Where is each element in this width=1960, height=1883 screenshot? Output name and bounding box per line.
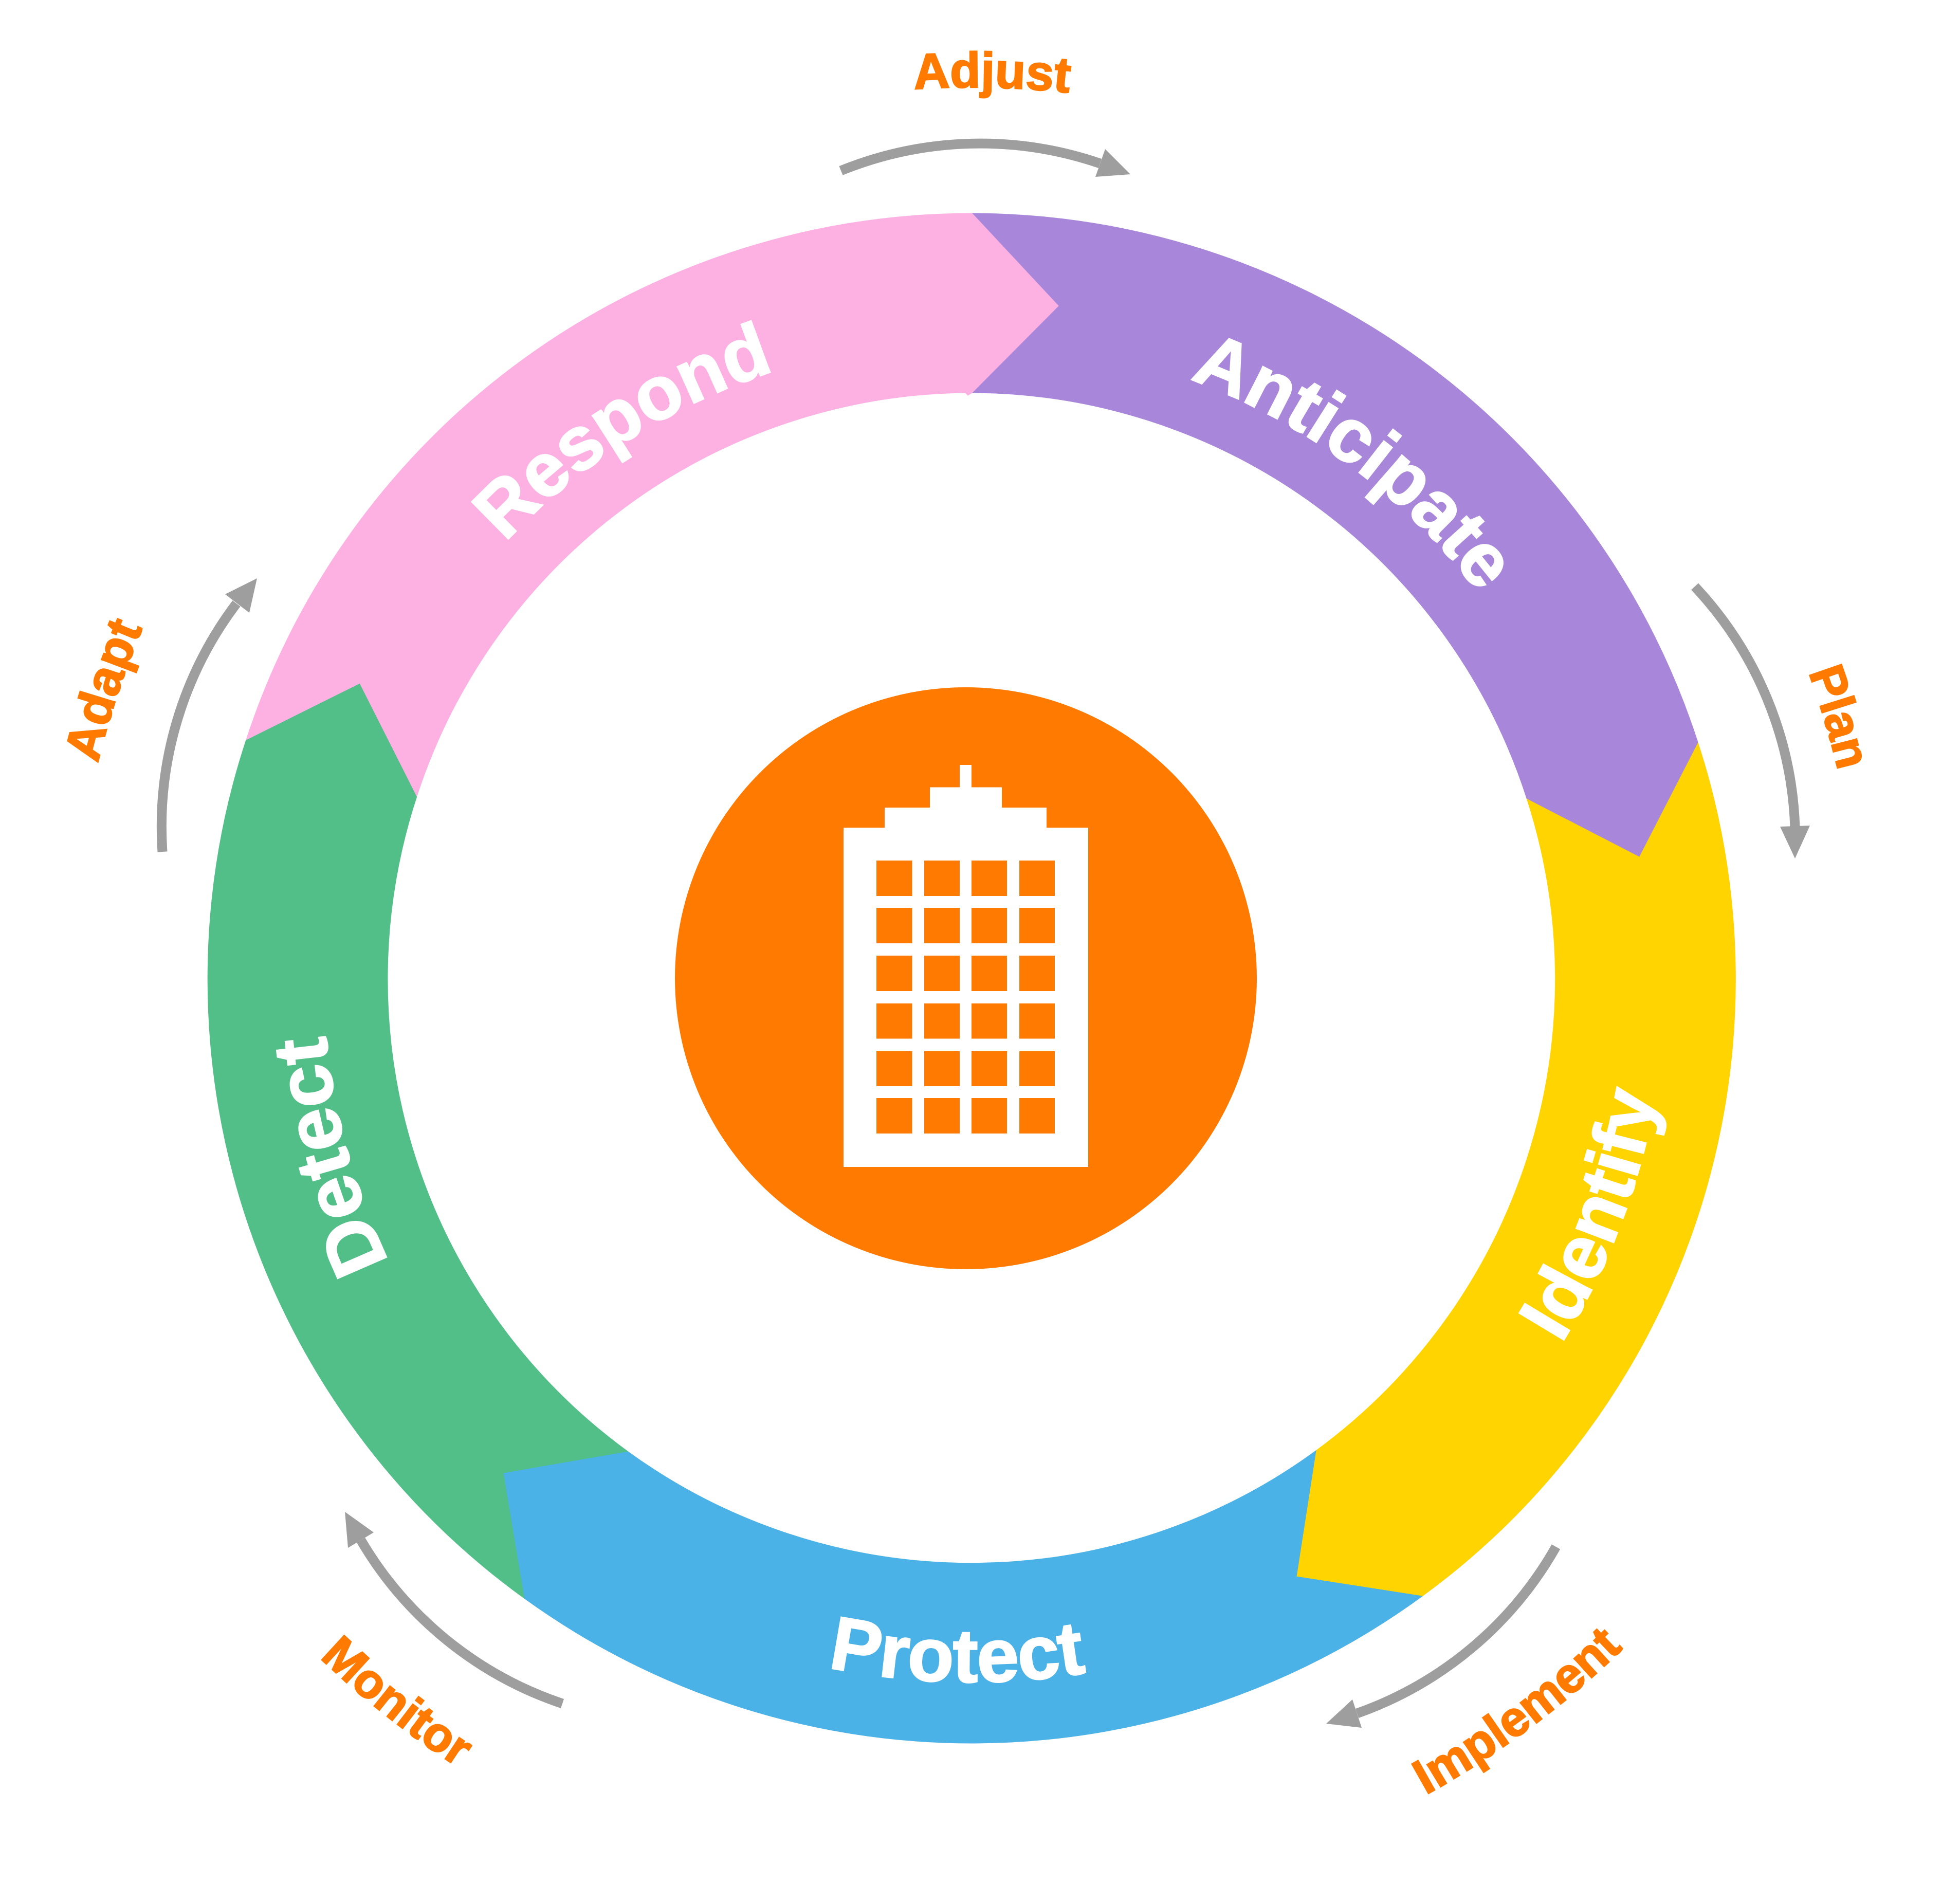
- label: Plan: Plan: [1809, 663, 1862, 769]
- label: Respond: Respond: [471, 320, 771, 540]
- arrow: Adjust: [841, 143, 1130, 177]
- segment: Detect: [208, 683, 628, 1599]
- label: Monitor: Monitor: [321, 1635, 472, 1763]
- segment: Identify: [1296, 742, 1735, 1596]
- label: Anticipate: Anticipate: [1190, 338, 1504, 587]
- label: Adjust: Adjust: [914, 50, 1072, 99]
- arrow: Plan: [1695, 587, 1810, 858]
- segment: Respond: [246, 213, 1058, 796]
- arrow: Monitor: [345, 1512, 562, 1704]
- label: Adapt: Adapt: [67, 618, 143, 763]
- segment: Anticipate: [972, 213, 1698, 856]
- label: Detect: Detect: [276, 1036, 388, 1279]
- arrow: Adapt: [161, 578, 257, 852]
- icon: office building: [844, 765, 1088, 1167]
- cycle ring: [208, 213, 1735, 1743]
- label: Protect: Protect: [832, 1616, 1087, 1684]
- segment: Protect: [504, 1451, 1422, 1743]
- center orange circle: [675, 687, 1257, 1269]
- arrow: Implement: [1326, 1547, 1556, 1728]
- label: Identify: Identify: [1518, 1086, 1666, 1341]
- label: Implement: Implement: [1411, 1628, 1623, 1795]
